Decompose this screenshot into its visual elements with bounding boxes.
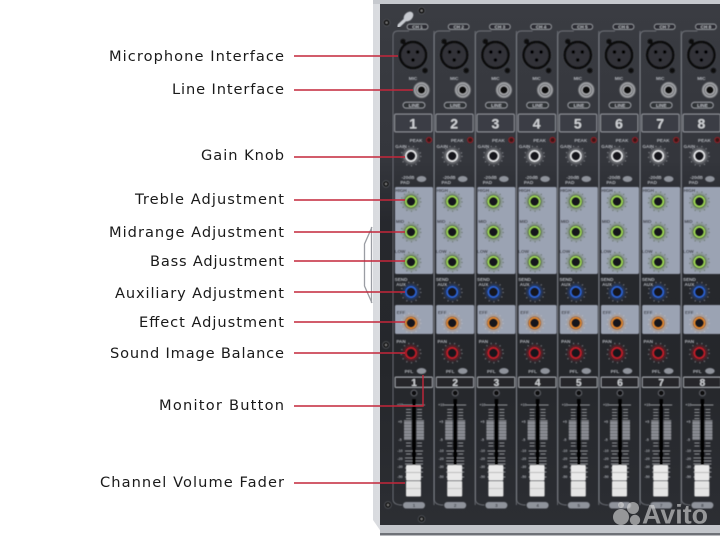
channel strip 1: MIC <box>409 76 418 81</box>
channel strip 3: +5 <box>480 420 484 424</box>
channel strip 7: GAIN <box>642 144 655 149</box>
channel strip 8: PAD <box>689 180 699 185</box>
channel strip 6: LOW <box>601 249 612 254</box>
channel strip 7: CH 7 <box>659 25 670 30</box>
channel strip 8: 8 <box>698 116 706 132</box>
channel strip 8: MID <box>684 219 693 224</box>
channel strip 5: GAIN <box>560 144 572 149</box>
channel strip 8: -10 <box>686 449 691 453</box>
channel strip 6: PAD <box>606 180 616 185</box>
channel strip 7: 7 <box>660 503 663 508</box>
channel strip 4: LINE <box>532 103 543 108</box>
channel strip 8: PEAK <box>698 138 711 143</box>
channel strip 5: +10 <box>562 403 568 407</box>
channel strip 5: PAD <box>565 180 575 185</box>
channel strip 3: SEND <box>477 277 490 282</box>
channel strip 2: CH 2 <box>453 25 464 30</box>
channel strip 7: 7 <box>656 116 664 132</box>
channel strip 7: LINE <box>656 103 666 108</box>
channel strip 1: -20 <box>397 457 403 461</box>
callout: Channel Volume Fader: Channel Volume Fader <box>100 474 284 491</box>
channel strip 2: -20 <box>439 457 444 461</box>
channel strip 6: GAIN <box>601 144 613 149</box>
panel screws <box>383 7 425 522</box>
channel strip 2: PEAK <box>451 138 464 143</box>
channel strip 5: -20 <box>562 457 567 461</box>
channel strip 4: -30 <box>521 465 526 469</box>
channel strip 1: 1 <box>409 116 417 132</box>
channel strip 2: PAN <box>438 339 448 344</box>
channel strip 3: AUX <box>479 282 489 287</box>
channel strip 2: AUX <box>437 282 448 287</box>
channel strip 1: +5 <box>398 420 402 424</box>
watermark: Avito logo: Avito <box>642 500 708 530</box>
channel strip 3: MIC <box>491 76 500 81</box>
channel strip 4 <box>517 24 558 508</box>
channel strip 3: 3 <box>495 503 498 508</box>
channel strip 5: LOW <box>559 249 571 254</box>
channel strip 4: 4 <box>533 116 541 132</box>
channel strip 2: -20dB <box>443 175 456 180</box>
channel strip 4: -10 <box>521 449 526 453</box>
channel strip 3: GAIN <box>478 144 490 149</box>
channel strip 2: 2 <box>454 503 457 508</box>
channel strip 8 <box>681 24 720 508</box>
channel strip 5: -30 <box>562 465 567 469</box>
channel strip 3: -10 <box>480 449 485 453</box>
channel strip 8: 8 <box>701 503 704 508</box>
channel strip 4: 4 <box>536 503 539 508</box>
callout: Gain Knob: Gain Knob <box>201 147 284 164</box>
channel strip 1: CH 1 <box>412 25 423 30</box>
channel strip 2: +10 <box>438 403 444 407</box>
channel strip 5: 5 <box>576 378 582 389</box>
channel strip 8: -50 <box>686 475 691 479</box>
channel strip 8: PFL <box>693 369 702 374</box>
channel strip 1: PAN <box>396 339 406 344</box>
callout: Effect Adjustment: Effect Adjustment <box>139 314 284 331</box>
channel strip 5 <box>558 24 599 508</box>
channel strip 1: GAIN <box>395 144 407 149</box>
channel strip 1: -5 <box>398 438 402 442</box>
channel strip 4: AUX <box>520 282 530 287</box>
channel strip 6: EFF <box>603 310 612 315</box>
channel strip 7: PAD <box>648 180 658 185</box>
channel strip 2: 2 <box>452 378 458 389</box>
channel strip 6: AUX <box>602 282 613 287</box>
channel strip 5: PAN <box>561 339 571 344</box>
channel strip 8: LOW <box>683 249 694 254</box>
channel strip 3: 3 <box>494 378 500 389</box>
channel strip 1: PFL <box>405 369 414 374</box>
channel strip 5: EFF <box>561 310 570 315</box>
callout: Monitor Button: Monitor Button <box>159 397 284 414</box>
callout: Midrange Adjustment: Midrange Adjustment <box>109 224 284 241</box>
channel strip 2: -10 <box>439 449 444 453</box>
channel strip 8: MIC <box>697 76 706 81</box>
channel strip 8: GAIN <box>684 144 696 149</box>
channel strip 2: SEND <box>436 277 449 282</box>
channel strip 1: +10 <box>397 403 403 407</box>
channel strip 4: 4 <box>535 378 541 389</box>
channel strip 6: -20 <box>603 457 609 461</box>
channel strip 4: +10 <box>521 403 527 407</box>
channel strip 6: +5 <box>604 420 608 424</box>
channel strip 5: MID <box>561 219 570 224</box>
channel strip 6: 6 <box>619 503 622 508</box>
channel strip 1: HIGH <box>395 188 407 193</box>
channel strip 5: HIGH <box>560 188 572 193</box>
channel strip 1 <box>393 24 434 508</box>
callout: Bass Adjustment: Bass Adjustment <box>150 253 284 270</box>
channel strip 3: -20 <box>480 457 485 461</box>
channel strip 7: LOW <box>642 249 653 254</box>
channel strip 5: AUX <box>561 282 572 287</box>
channel strip 7: MID <box>643 219 652 224</box>
channel strip 8: AUX <box>685 282 695 287</box>
channel strip 6: -20dB <box>608 175 621 180</box>
channel strip 6: PAN <box>602 339 612 344</box>
channel strip 7: -10 <box>645 449 650 453</box>
channel strip 1: -20dB <box>402 175 415 180</box>
channel strip 4: SEND <box>518 277 532 282</box>
channel strip 6: PEAK <box>616 138 629 143</box>
channel strip 8: 8 <box>700 378 706 389</box>
channel strip 7: PFL <box>652 369 661 374</box>
channel strip 5: 5 <box>578 503 581 508</box>
channel strip 8: SEND <box>683 277 696 282</box>
channel strip 3: 3 <box>492 116 500 132</box>
channel strip 4: PAD <box>524 180 534 185</box>
channel strip 4: MIC <box>532 76 541 81</box>
channel strip 3: PFL <box>487 369 496 374</box>
channel strip 5: -50 <box>562 475 567 479</box>
channel strip 2 <box>434 24 475 508</box>
channel strip 4: PAN <box>520 339 530 344</box>
channel strip 2: PAD <box>442 180 452 185</box>
channel strip 7: EFF <box>644 310 653 315</box>
channel strip 1: LINE <box>409 103 419 108</box>
channel strip 5: -10 <box>562 449 567 453</box>
channel strip 1: SEND <box>395 277 408 282</box>
channel strip 4: HIGH <box>519 188 531 193</box>
channel strip 2: 2 <box>450 116 458 132</box>
channel strip 4: -20 <box>521 457 526 461</box>
callout: Microphone Interface: Microphone Interface <box>109 48 284 65</box>
channel strip 5: -20dB <box>566 175 580 180</box>
channel strip 5: PEAK <box>574 138 588 143</box>
channel strip 8: -30 <box>686 465 691 469</box>
channel strip 7: -5 <box>646 438 649 442</box>
channel strip 3 <box>475 24 516 508</box>
channel strip 3: -30 <box>480 465 485 469</box>
channel strip 7: PAN <box>644 339 654 344</box>
channel strip 2: GAIN <box>436 144 449 149</box>
channel strip 8: +5 <box>686 420 690 424</box>
callout: Auxiliary Adjustment: Auxiliary Adjustment <box>115 285 284 302</box>
channel strip 7: MIC <box>656 76 665 81</box>
callout: Monitor Button <box>159 375 423 414</box>
channel strip 4: LOW <box>518 249 530 254</box>
mixer case <box>364 0 720 536</box>
channel strip 2: MIC <box>450 76 459 81</box>
channel strip 2: -50 <box>439 475 444 479</box>
channel strip 4: GAIN <box>519 144 531 149</box>
channel strip 5: +5 <box>563 420 567 424</box>
channel strip 7: -50 <box>645 475 650 479</box>
channel strip 1: PEAK <box>410 138 423 143</box>
channel strip 3: HIGH <box>478 188 490 193</box>
channel strip 6: -50 <box>603 475 609 479</box>
channel strip 7: -20 <box>645 457 650 461</box>
channel strip 3: PAN <box>479 339 489 344</box>
icon: microphone <box>398 10 415 26</box>
channel strip 1: -50 <box>397 475 403 479</box>
channel strip 7: -30 <box>645 465 650 469</box>
channel strip 1: -10 <box>397 449 403 453</box>
channel strip 2: EFF <box>438 310 447 315</box>
callout: Sound Image Balance: Sound Image Balance <box>110 345 284 362</box>
channel strip 8: +10 <box>685 403 691 407</box>
channel strip 3: MID <box>478 219 487 224</box>
channel strip 6: LINE <box>615 103 625 108</box>
channel strip 7 <box>640 24 681 508</box>
channel strip 7: +5 <box>645 420 649 424</box>
channel strip 7: AUX <box>643 282 654 287</box>
channel strip 5: PFL <box>569 369 578 374</box>
channel strip 3: PEAK <box>492 138 505 143</box>
metal frame <box>373 0 720 533</box>
channel strip 8: PAN <box>685 339 695 344</box>
channel strip 5: 5 <box>574 116 582 132</box>
channel strip 2: HIGH <box>436 188 449 193</box>
channel strip 6: -10 <box>603 449 609 453</box>
channel strip 4: EFF <box>520 310 529 315</box>
channel strip 7: SEND <box>642 277 655 282</box>
channel strip 1: EFF <box>397 310 406 315</box>
channel strip 2: -5 <box>440 438 443 442</box>
channel strip 5: SEND <box>559 277 573 282</box>
channel strip 1: MID <box>396 219 405 224</box>
channel strip 6: CH 6 <box>618 25 629 30</box>
channel strip 1: 1 <box>413 503 416 508</box>
channel strip 4: -50 <box>521 475 526 479</box>
channel strip 8: CH 8 <box>701 25 712 30</box>
channel strip 3: LOW <box>477 249 488 254</box>
watermark: Avito logo <box>613 500 708 530</box>
channel strip 3: CH 3 <box>495 25 506 30</box>
channel strip 6: -5 <box>604 438 608 442</box>
channel strip 3: LINE <box>491 103 502 108</box>
channel strip 4: -20dB <box>525 175 539 180</box>
channel strip 4: MID <box>519 219 528 224</box>
channel strip 3: -5 <box>481 438 484 442</box>
channel strip 3: PAD <box>483 180 493 185</box>
channel strip 6: +10 <box>603 403 609 407</box>
channel strip 1: AUX <box>396 282 407 287</box>
channel strip 7: -20dB <box>649 175 662 180</box>
channel strip 6: PFL <box>611 369 620 374</box>
callout: Line Interface: Line Interface <box>172 81 284 98</box>
channel strip 7: 7 <box>658 378 664 389</box>
channel strip 6: MIC <box>615 76 624 81</box>
channel strip 3: EFF <box>479 310 488 315</box>
channel strip 6: 6 <box>617 378 623 389</box>
channel strip 2: +5 <box>439 420 443 424</box>
dark faceplate <box>380 4 720 525</box>
channel strip 5: CH 5 <box>577 25 588 30</box>
channel strip 1: LOW <box>395 249 406 254</box>
channel strip 4: -5 <box>522 438 525 442</box>
channel strip 3: -20dB <box>484 175 497 180</box>
channel strip 4: +5 <box>522 420 526 424</box>
channel strip 1: 1 <box>411 378 417 389</box>
carry handle <box>364 227 372 303</box>
channel strip 8: -20dB <box>690 175 703 180</box>
channel strip 5: LINE <box>574 103 584 108</box>
channel strip 6 <box>599 24 640 508</box>
channel strip 7: PEAK <box>657 138 670 143</box>
channel strip 2: LOW <box>436 249 447 254</box>
channel strip 2: -30 <box>439 465 444 469</box>
channel strip 2: LINE <box>450 103 460 108</box>
channel strip 8: -20 <box>686 457 691 461</box>
channel strip 7: +10 <box>644 403 650 407</box>
channel strip 6: -30 <box>603 465 609 469</box>
channel strip 7: HIGH <box>642 188 655 193</box>
channel strip 4: CH 4 <box>536 25 547 30</box>
channel strip 3: +10 <box>479 403 485 407</box>
channel strip 8: EFF <box>685 310 694 315</box>
channel strip 8: -5 <box>687 438 690 442</box>
callout: Treble Adjustment: Treble Adjustment <box>134 191 284 208</box>
channel strip 1: PAD <box>400 180 410 185</box>
channel strip 6: 6 <box>615 116 623 132</box>
channel strip 5: -5 <box>563 438 566 442</box>
channel strip 5: MIC <box>574 76 583 81</box>
channel strip 4: PEAK <box>533 138 547 143</box>
channel strip 1: -30 <box>397 465 403 469</box>
channel strip 6: HIGH <box>601 188 613 193</box>
channel strip 6: MID <box>602 219 611 224</box>
channel strip 3: -50 <box>480 475 485 479</box>
channel strip 4: PFL <box>528 369 537 374</box>
channel strip 6: SEND <box>601 277 614 282</box>
channel strip 8: LINE <box>697 103 708 108</box>
channel strip 2: MID <box>437 219 446 224</box>
channel strip 8: HIGH <box>684 188 696 193</box>
channel strip 2: PFL <box>446 369 455 374</box>
